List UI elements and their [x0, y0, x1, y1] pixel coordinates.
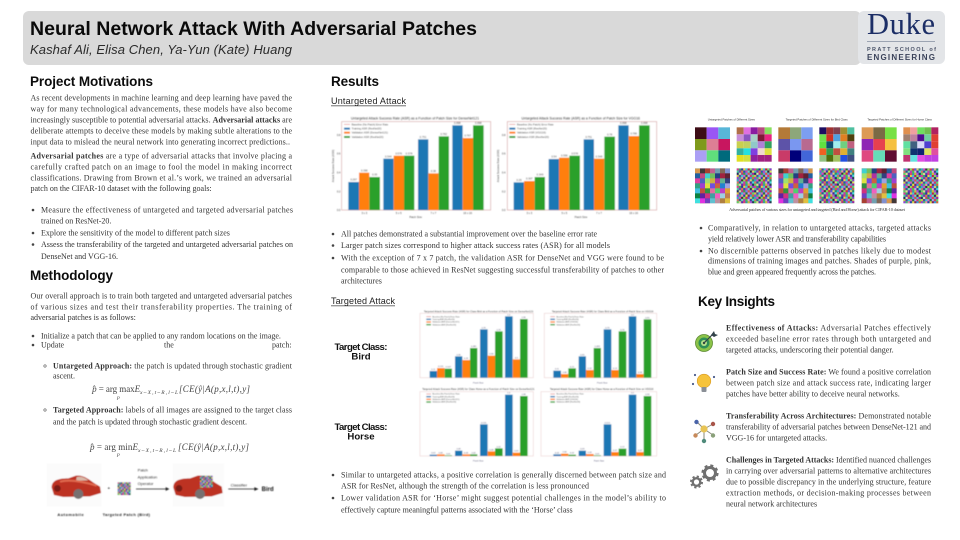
text block: untargeted approach: Untargeted Approach: the patch is updated through stochastic gradient — [53, 362, 293, 370]
patch: untargeted 5x5 — [737, 127, 772, 162]
value labels: 1.0 — [507, 314, 511, 316]
axis label: Patch Size — [597, 381, 608, 384]
patch: bird 3x3 — [778, 127, 813, 162]
label: target class bird: Target Class: — [334, 342, 388, 353]
legend: Validation ASR (ResNet20) — [517, 135, 549, 139]
value labels: 0.15 — [570, 366, 575, 368]
value labels: 0.548 — [596, 154, 603, 158]
icon: target — [696, 331, 718, 352]
authors: Kashaf Ali, Elisa Chen, Ya-Yun (Kate) Huang — [30, 42, 293, 57]
value labels: 0.751 — [420, 135, 427, 139]
image: patched automobile — [173, 475, 223, 499]
value labels: 0.35 — [372, 173, 378, 177]
icon: light bulb — [692, 374, 715, 392]
value labels: 0.576 — [395, 151, 403, 155]
logo: Duke Pratt School of Engineering — [858, 7, 945, 64]
axes labels: 0.0 — [502, 208, 506, 212]
subheading: targeted attack: Targeted Attack — [331, 296, 396, 306]
text block: challenges in targeted attacks — [726, 456, 931, 508]
axes labels: 0.2 — [502, 189, 506, 193]
axes labels — [496, 133, 639, 219]
text block: adversarial patches — [30, 152, 293, 193]
text block: adversarial attacks intro: way for many technological advancements, these models have also become — [30, 104, 292, 114]
value labels: 0.35 — [457, 354, 462, 356]
value labels: 0.29 — [516, 178, 522, 182]
value labels: 0.307 — [526, 177, 533, 181]
text block: effectiveness of attacks — [726, 324, 931, 354]
text block: approach: of various sizes and test their transferability properties. The training of — [30, 302, 292, 312]
axes labels: 3 x 3 — [361, 211, 368, 215]
legend: Validation ASR (DenseNet121) — [352, 131, 388, 135]
bullet list: targeted findings — [332, 470, 666, 514]
bullet list: untargeted findings: All patches demonstrated a substantial improvement over the baseline error rate — [341, 230, 597, 238]
formula: untargeted: [CE(ŷ|A(p,x,l,t),y] — [179, 384, 250, 394]
legend: Baseline (No Patch) Error Rate — [352, 122, 389, 126]
patch: untargeted 3x3 — [695, 127, 730, 162]
legend — [344, 122, 389, 139]
value labels: 0.898 — [475, 121, 482, 125]
bullet list: goals: DenseNet and VGG-16. — [41, 252, 118, 261]
axes labels: 16 x 16 — [463, 211, 473, 215]
axes labels: Patch Size — [575, 215, 588, 219]
bullet list: patch comparisons: Comparatively, in relation to untargeted attacks, targeted attacks — [708, 224, 931, 232]
label: targeted patch bird: Targeted Patch (Bird) — [103, 512, 151, 517]
legend: Training ASR (ResNet20) — [556, 395, 579, 398]
bar chart: targeted horse DenseNet: Targeted Attack Success Rate (ASR) for Class Horse as a Function of Patch Size on DenseNet121 — [422, 388, 535, 391]
value labels — [516, 121, 648, 182]
bar chart: targeted bird DenseNet — [420, 310, 534, 384]
legend — [426, 315, 461, 326]
text block: transferability across architectures — [726, 412, 931, 442]
text block: adversarial attacks intro: As recent developments in machine learning and deep learning have paved the — [30, 94, 292, 102]
formula: targeted: p — [116, 452, 120, 458]
legend — [550, 393, 585, 404]
value labels: 0.12 — [497, 446, 502, 448]
logo: Duke Pratt School of Engineering: PRATT SCHOOL of — [867, 47, 936, 53]
text block: adversarial patches: Adversarial patches are a type of adversarial attacks that involve placing a — [30, 152, 292, 160]
legend: Validation ASR (DenseNet121) — [432, 321, 460, 324]
value labels: 0.767 — [464, 134, 472, 138]
panel: key insights — [691, 294, 931, 508]
heading: results: Results — [331, 74, 379, 89]
icon: plus: + — [108, 486, 111, 491]
panel: project motivations — [30, 74, 293, 261]
value labels: 0.13 — [613, 368, 618, 370]
bars — [514, 125, 650, 210]
patch: horse 7x7 — [862, 168, 897, 203]
label: classifier: Classifier — [231, 482, 248, 487]
icon: gears — [691, 466, 718, 488]
text block: patch size and success rate — [726, 368, 931, 398]
label: target class horse — [334, 422, 388, 442]
axes labels: 0.6 — [502, 152, 506, 156]
bar chart: untargeted ASR VGG16 — [496, 116, 657, 219]
legend: Baseline (No Patch) Error Rate — [432, 315, 461, 318]
value labels: 0.95 — [645, 317, 650, 319]
value labels — [431, 314, 527, 371]
value labels: 1.0 — [631, 393, 635, 395]
axes labels: 0.8 — [502, 133, 506, 137]
value labels — [431, 393, 527, 455]
axes labels: 0.6 — [337, 152, 341, 156]
axis label: Patch Size — [473, 381, 484, 384]
value labels: 0.35 — [580, 354, 585, 356]
value labels: 0.96 — [522, 317, 527, 319]
title: Neural Network Attack With Adversarial Patches — [30, 18, 477, 40]
bullet list: untargeted findings: architectures — [341, 276, 382, 286]
legend: Training ASR (ResNet20) — [432, 318, 455, 321]
value labels: 0.02 — [555, 452, 560, 454]
bar chart: untargeted ASR DenseNet121 — [331, 116, 491, 219]
bullet list: steps — [32, 332, 292, 350]
formula: targeted: p̂ = arg minE — [89, 442, 138, 452]
value labels: 0.09 — [580, 449, 585, 451]
formula: untargeted: x~X,t~R,l~L — [139, 390, 178, 396]
value labels: 0.02 — [472, 452, 477, 454]
axes labels: 3 x 3 — [526, 211, 533, 215]
bullet list: targeted findings: ASR for ResNet, although the strength of the correlation is less pronounced — [341, 482, 589, 490]
text block: effectiveness of attacks: exceeded baseline error rates through both untargeted and — [726, 334, 931, 344]
legend: Validation ASR (VGG16) — [556, 321, 578, 324]
icon: network — [693, 420, 715, 443]
legend: Training ASR (ResNet20) — [556, 318, 579, 321]
axis label: Patch Size — [473, 459, 484, 462]
text block: targeted approach — [44, 406, 292, 426]
text block: adversarial attacks intro: deliberate attempts to deceive these models by making subtle alterations to the — [30, 126, 292, 136]
image: targeted patch — [118, 482, 131, 495]
value labels: 0.02 — [431, 453, 436, 455]
axes labels: Attack Success Rate (ASR) — [496, 150, 500, 182]
legend: Validation ASR (VGG16) — [556, 398, 578, 401]
legend: Training ASR (ResNet20) — [352, 127, 382, 131]
legend — [426, 393, 461, 404]
value labels: 0.544 — [385, 154, 392, 158]
patch titles — [708, 117, 933, 121]
value labels: 0.76 — [497, 329, 502, 331]
text block: transferability across architectures: VGG-16 for untargeted attacks. — [726, 434, 827, 442]
bullet list: goals — [32, 206, 293, 261]
value labels: 0.147 — [446, 367, 452, 369]
bullet list: goals: Assess the transferability of the targeted and untargeted adversarial patches on — [41, 240, 293, 249]
legend: Training ASR (ResNet20) — [432, 395, 455, 398]
value labels — [350, 121, 482, 182]
patch: untargeted 7x7 — [695, 168, 730, 203]
text block: untargeted approach: ascent. — [53, 372, 75, 380]
bullet list: goals: Explore the sensitivity of the model to different patch sizes — [41, 228, 230, 238]
bar chart: targeted bird DenseNet: Targeted Attack Success Rate (ASR) for Class Bird as a Function of Patch Size on DenseNet121 — [424, 310, 534, 313]
bullet list: steps: Initialize a patch that can be applied to any random locations on the image. — [41, 332, 281, 340]
bullet list: patch comparisons: blue and green appeared frequently across the patches. — [708, 268, 876, 276]
text block: effectiveness of attacks: Effectiveness of Attacks: Adversarial Patches effectively — [726, 324, 931, 332]
value labels: 0.54 — [551, 155, 557, 159]
bar chart: targeted horse VGG — [541, 388, 657, 462]
bars — [348, 125, 484, 210]
bullet list: untargeted findings: comparable to those achieved in ResNet suggesting successful transferability of patches to other — [341, 266, 664, 274]
value labels: 0.297 — [350, 178, 358, 182]
legend: Baseline (No Patch) Error Rate — [517, 122, 554, 126]
legend: Validation ASR (VGG16) — [517, 131, 546, 135]
value labels: 0.06 — [563, 372, 568, 374]
axes labels: 0.8 — [337, 133, 341, 137]
legend: Validation ASR (ResNet20) — [432, 401, 456, 404]
text block: adversarial attacks intro: increasingly susceptible to potential adversarial attacks. Adversarial attacks are — [30, 116, 292, 124]
legend: Training ASR (ResNet20) — [517, 127, 547, 131]
bar chart: untargeted ASR VGG16: Untargeted Attack Success Rate (ASR) as a Function of Patch Size for VGG16 — [521, 116, 640, 120]
value labels: 0.03 — [588, 452, 593, 454]
value labels: 0.898 — [641, 121, 648, 125]
value labels: 0.05 — [514, 451, 519, 453]
value labels: 0.78 — [607, 132, 613, 136]
value labels: 0.12 — [588, 368, 593, 370]
bullet list: targeted findings: Similar to untargeted attacks, a positive correlation is generally discerned between patch size and — [341, 470, 666, 480]
text block: challenges in targeted attacks: Challenges in Targeted Attacks: Identified nuanced challenges — [726, 456, 931, 464]
value labels: 0.578 — [571, 151, 579, 155]
value labels: 0.01 — [595, 453, 600, 455]
value labels: 0.98 — [522, 394, 527, 396]
value labels: 0.515 — [481, 422, 487, 424]
formula: targeted — [89, 442, 249, 458]
value labels: 0.01 — [446, 453, 451, 455]
value labels: 1.0 — [631, 314, 635, 316]
legend: Validation ASR (ResNet20) — [556, 323, 580, 326]
value labels: 0.349 — [537, 173, 544, 177]
value labels: 0.03 — [439, 452, 444, 454]
panel: methodology — [30, 268, 293, 517]
bullet list: targeted findings: effectively capture meaningful patterns associated with the ‘Horse’ class — [341, 506, 573, 514]
value labels: 0.11 — [431, 369, 436, 371]
heading: project motivations: Project Motivations — [30, 74, 153, 89]
legend: Baseline (No Patch) Error Rate — [556, 393, 585, 396]
header banner — [23, 11, 861, 65]
bar chart: targeted horse VGG: Targeted Attack Success Rate (ASR) for Class Horse as a Function of Patch Size on VGG16 — [550, 388, 654, 391]
value labels: 0.578 — [406, 151, 413, 155]
axes labels: 7 x 7 — [596, 211, 602, 215]
text block: adversarial attacks intro — [30, 94, 292, 146]
text block: patch size and success rate: between patch size and attack success rate, indicating larger — [726, 378, 931, 388]
text block: adversarial attacks intro: input data to mislead the neural network into generating incorrect predictions.. — [30, 138, 290, 146]
bullet list: targeted findings: Lower validation ASR for ‘Horse’ might suggest potential challenges in the model’s ability to — [341, 494, 666, 502]
value labels: 0.79 — [605, 327, 610, 329]
legend: Validation ASR (ResNet20) — [352, 135, 384, 139]
panel: adversarial patch gallery — [695, 117, 938, 203]
label: target class horse: Horse — [347, 432, 375, 442]
axes labels: 5 x 5 — [396, 211, 402, 215]
formula: untargeted — [91, 384, 250, 401]
value labels: 0.76 — [620, 329, 625, 331]
caption: patch gallery: Adversarial patches of various sizes for untargeted and targeted (Bird and Horse) attack for CIFAR-10 dataset — [729, 207, 906, 212]
text block: transferability across architectures: transferability of adversarial patches between DenseNet-121 and — [726, 422, 931, 432]
patch: horse 3x3 — [862, 127, 897, 162]
text block: challenges in targeted attacks: in carrying over adversarial patterns to alternative architectures — [726, 466, 931, 476]
bar chart: targeted bird VGG: Targeted Attack Success Rate (ASR) for Class Bird as a Function of Patch Size on VGG16 — [552, 310, 654, 313]
bars — [430, 316, 528, 378]
value labels: 0.06 — [638, 372, 643, 374]
legend: Baseline (No Patch) Error Rate — [432, 393, 461, 396]
bullet list: steps: the — [164, 340, 174, 350]
label: target class bird: Bird — [351, 352, 371, 362]
value labels: 0.3 — [515, 357, 519, 359]
legend: Validation ASR (DenseNet121) — [432, 398, 460, 401]
value labels: 0.04 — [563, 452, 568, 454]
value labels: 0.485 — [595, 346, 601, 348]
value labels: 0.07 — [638, 450, 643, 452]
bars — [430, 395, 528, 456]
legend: Validation ASR (ResNet20) — [556, 401, 580, 404]
patch titles: Targeted Patches of Different Sizes for Horse Class — [867, 117, 933, 121]
bullet list: patch comparisons: dimensions of training images and patches. Shades of purple, pink, — [708, 256, 931, 266]
arrow: classifier — [228, 488, 258, 490]
bars — [553, 395, 651, 456]
label: automobile: Automobile — [57, 512, 84, 517]
value labels: 0.396 — [361, 168, 368, 172]
axes labels: 0.2 — [337, 189, 341, 193]
value labels — [555, 393, 650, 455]
value labels: 0.898 — [620, 121, 627, 125]
text block: transferability across architectures: Transferability Across Architectures: Demonstrated notable — [726, 412, 931, 420]
bar chart: targeted horse DenseNet — [420, 388, 535, 462]
value labels: 0.07 — [613, 450, 618, 452]
patch: horse 16x16 — [903, 168, 938, 203]
text block: challenges in targeted attacks: extraction methods, or decision-making processes between — [726, 488, 931, 498]
value labels — [555, 314, 650, 374]
value labels: 0.98 — [645, 394, 650, 396]
heading: key insights: Key Insights — [698, 294, 775, 309]
patch: untargeted 16x16 — [737, 168, 772, 203]
axes labels: 7 x 7 — [430, 211, 437, 215]
bullet list: untargeted findings: With the exception of 7 x 7 patch, the validation ASR for DenseNet and VGG were found to be — [341, 254, 664, 262]
value labels: 1.0 — [507, 393, 511, 395]
value labels: 0.03 — [464, 452, 469, 454]
axes labels: 5 x 5 — [561, 211, 568, 215]
logo: Duke Pratt School of Engineering: ENGINEERING — [867, 53, 935, 62]
heading: methodology: Methodology — [30, 268, 113, 283]
image: automobile — [52, 475, 101, 499]
value labels: 0.02 — [570, 453, 575, 455]
bullet list: patch comparisons: yield relatively lower ASR and transferability capabilities — [708, 234, 886, 244]
axes labels: 0.4 — [502, 171, 506, 175]
value labels: 0.09 — [457, 449, 462, 451]
arrow: apply patch — [136, 488, 169, 490]
text block: targeted approach: Targeted Approach: labels of all images are assigned to the target class — [53, 406, 292, 414]
label: bird: Bird — [262, 487, 274, 493]
patch: horse 5x5 — [903, 127, 938, 162]
axes labels: 0.4 — [337, 171, 341, 175]
bar chart: targeted bird VGG — [544, 310, 657, 384]
formula: untargeted: p — [116, 395, 120, 401]
legend — [550, 315, 585, 326]
diagram: patch application pipeline — [47, 463, 274, 517]
subheading: untargeted attack: Untargeted Attack — [331, 96, 406, 106]
value labels: 0.786 — [630, 132, 638, 136]
axes labels: 16 x 16 — [629, 211, 639, 215]
value labels: 0.515 — [605, 422, 611, 424]
bullet list: patch comparisons — [700, 224, 932, 276]
text block: patch size and success rate: patches have better ability to deceive neural networks. — [726, 390, 900, 398]
value labels: 0.751 — [585, 135, 593, 139]
text block: challenges in targeted attacks: neural network architectures — [726, 500, 817, 508]
bullet list: untargeted findings: Larger patch sizes correspond to higher attack success rates (ASR) for all models — [341, 241, 610, 250]
patch titles: Targeted Patches of Different Sizes for Bird Class — [786, 117, 848, 121]
panel: results — [331, 74, 666, 514]
text block: adversarial patches: classifications. Drawing from Brown et al.’s work, we trained an adversarial — [30, 174, 293, 182]
legend — [509, 122, 554, 139]
axes labels: Attack Success Rate (ASR) — [331, 150, 335, 182]
label: target class bird — [334, 342, 388, 362]
value labels: 0.782 — [440, 132, 448, 136]
value labels: 0.39 — [431, 169, 436, 173]
bullet list: steps: patch: — [272, 340, 292, 350]
text block: adversarial patches: carefully crafted patch on an image to fool the model in making incorrect — [30, 162, 293, 172]
label: patch application operator — [138, 468, 157, 486]
text block: effectiveness of attacks: targeted attacks, underscoring their potential danger. — [726, 346, 894, 354]
bars — [553, 316, 651, 378]
value labels: 0.155 — [438, 366, 444, 368]
axis label: Patch Size — [594, 459, 605, 462]
text block: approach: Our overall approach is to train both targeted and untargeted adversarial patches — [30, 292, 292, 300]
axes labels: Patch Size — [409, 215, 423, 219]
value labels: 0.08 — [489, 449, 494, 451]
label: target class horse: Target Class: — [334, 422, 388, 433]
label: patch application operator: Operator — [138, 481, 154, 486]
value labels: 0.556 — [561, 153, 568, 157]
legend: Baseline (No Patch) Error Rate — [556, 315, 585, 318]
formula: targeted: [CE(ŷ|A(p,x,l,t),y] — [178, 442, 249, 452]
bar chart: untargeted ASR DenseNet121: Untargeted Attack Success Rate (ASR) as a Function of Patch Size for DenseNet121 — [351, 116, 479, 120]
bullet list: steps: Update — [41, 340, 65, 350]
value labels: 0.12 — [620, 447, 625, 449]
bullet list: goals: Measure the effectiveness of untargeted and targeted adversarial patches — [41, 206, 293, 214]
label: patch application operator: Application — [138, 474, 157, 479]
axes labels — [331, 133, 473, 219]
value labels: 0.29 — [464, 358, 469, 360]
legend: Validation ASR (ResNet20) — [432, 323, 456, 326]
text block: adversarial patches: patch on the CIFAR-10 dataset with the following goals: — [30, 184, 212, 193]
bullet list: patch comparisons: No discernible patterns observed in patches likely due to modest — [708, 246, 932, 256]
formula: untargeted: p̂ = arg maxE — [91, 384, 141, 394]
text block: untargeted approach — [44, 362, 293, 380]
text block: approach — [30, 292, 292, 322]
patch: bird 5x5 — [819, 127, 854, 162]
axes labels: 0.0 — [337, 208, 341, 212]
text block: challenges in targeted attacks: due to possible discrepancy in the underlying structure, feature — [726, 478, 931, 486]
logo: Duke Pratt School of Engineering: Duke — [867, 7, 935, 41]
value labels: 0.11 — [555, 369, 560, 371]
patch: bird 16x16 — [819, 168, 854, 203]
text block: approach: adversarial patches is as follows: — [30, 313, 136, 322]
patch: bird 7x7 — [778, 168, 813, 203]
label: patch application operator: Patch — [138, 468, 148, 473]
value labels: 0.79 — [482, 327, 487, 329]
bullet list: goals: trained on ResNet-20. — [41, 216, 111, 226]
value labels: 0.36 — [489, 354, 494, 356]
bullet list: untargeted findings — [332, 230, 664, 286]
value labels: 0.485 — [471, 346, 477, 348]
value labels: 0.898 — [454, 121, 461, 125]
formula: targeted: x~X,t~R,l~L — [137, 448, 176, 454]
text block: patch size and success rate: Patch Size and Success Rate: We found a positive correlation — [726, 368, 931, 376]
text block: targeted approach: and the patch is updated through stochastic gradient descent. — [53, 418, 247, 426]
patch titles: Untargeted Patches of Different Sizes — [708, 117, 756, 121]
